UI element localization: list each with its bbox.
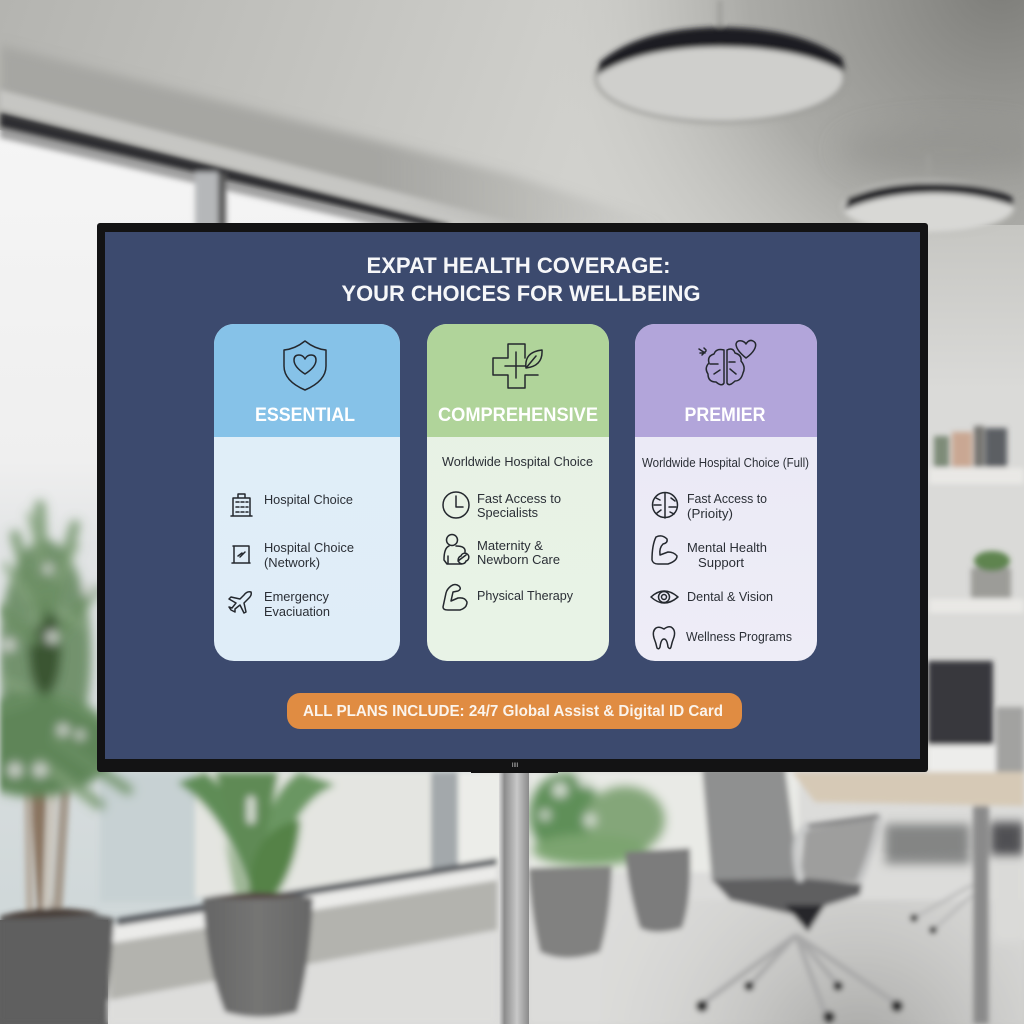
- footer banner: ALL PLANS INCLUDE: 24/7 Global Assist & Digital ID Card: [303, 703, 723, 720]
- window mullion: [195, 172, 218, 242]
- icon: brain and heart: [699, 340, 756, 385]
- text: mental health support: [687, 541, 767, 570]
- lower window mullion: [431, 772, 458, 872]
- monitor brand mark: IIII: [512, 763, 519, 769]
- right plant: [529, 773, 665, 866]
- shadow band: [0, 45, 670, 232]
- text: hospital choice: Hospital Choice: [264, 493, 353, 507]
- chair: [696, 768, 972, 1023]
- text: fast access priority: [687, 492, 767, 521]
- floor: [108, 930, 497, 1024]
- icon: clock: [443, 492, 469, 518]
- icon: flexed arm: [443, 584, 467, 610]
- panel: essential: [214, 324, 400, 661]
- icon: tooth: [653, 627, 675, 649]
- sill top: [112, 862, 497, 943]
- back monitor: [928, 661, 993, 746]
- text: fast access to specialists: [477, 492, 561, 520]
- text: emergency evacuation: [264, 590, 330, 619]
- footer banner: [287, 693, 742, 729]
- text: dental and vision: Dental & Vision: [687, 590, 773, 604]
- icon: hospital building: [231, 494, 252, 516]
- sill front: [110, 877, 497, 1000]
- text: hospital choice network: (Network): [264, 556, 320, 570]
- title: EXPAT HEALTH COVERAGE:: [366, 253, 670, 278]
- icon: shield with heart: [284, 341, 326, 390]
- left pot: [0, 911, 114, 1024]
- text: physical therapy: Physical Therapy: [477, 589, 574, 603]
- icon: cross with leaf: [493, 344, 542, 388]
- shelf plant: [971, 551, 1011, 598]
- text: worldwide hospital choice full: Worldwide Hospital Choice (Full): [642, 456, 809, 470]
- title: [342, 253, 700, 306]
- centre plant: [178, 772, 335, 900]
- title: YOUR CHOICES FOR WELLBEING: [342, 281, 700, 306]
- panel: comprehensive: [427, 324, 609, 661]
- right pots: [625, 848, 690, 932]
- icon: clipboard: [232, 546, 250, 563]
- under desk dark: [885, 822, 1024, 942]
- text: hospital choice network: Hospital Choice: [264, 541, 354, 555]
- desk: [792, 772, 1024, 806]
- icon: mother and baby: [444, 534, 469, 564]
- text: maternity newborn care: Maternity &: [477, 539, 544, 553]
- text: fast access priority: Fast Access to: [687, 492, 767, 506]
- icon: globe brain: [652, 492, 678, 518]
- centre pot: [203, 893, 313, 1017]
- icon: flexed arm: [652, 536, 677, 564]
- text: fast access to specialists: Fast Access to: [477, 492, 561, 506]
- text: fast access to specialists: Specialists: [477, 506, 538, 520]
- window dark track: [117, 858, 497, 926]
- text: maternity newborn care: Newborn Care: [477, 553, 560, 567]
- ceiling lamp small: [842, 155, 1014, 233]
- wall items on right: [929, 468, 1024, 484]
- text: hospital choice network: [264, 541, 354, 570]
- shelf books: [934, 426, 1007, 467]
- light ridge: [0, 90, 600, 240]
- heading: premier: PREMIER: [684, 405, 766, 426]
- stand pole: [499, 770, 529, 1024]
- window frame top: [0, 112, 450, 233]
- left tree foliage: [0, 505, 128, 805]
- window lower haze: [100, 772, 195, 902]
- heading: essential: ESSENTIAL: [255, 405, 355, 426]
- text: emergency evacuation: Evaciuation: [264, 605, 330, 619]
- right window: [529, 772, 799, 872]
- screen: [105, 232, 920, 759]
- text: maternity newborn care: [477, 539, 560, 567]
- ceiling lamp large: [596, 0, 845, 122]
- text: emergency evacuation: Emergency: [264, 590, 330, 604]
- monitor frame: [97, 223, 928, 772]
- text: fast access priority: (Prioity): [687, 507, 733, 521]
- left tree trunks: [24, 780, 70, 915]
- heading: comprehensive: COMPREHENSIVE: [438, 405, 598, 426]
- monitor stand clasp: [471, 770, 558, 773]
- text: mental health support: Mental Health: [687, 541, 767, 555]
- text: mental health support: Support: [698, 556, 745, 570]
- text: worldwide hospital choice: Worldwide Hospital Choice: [442, 455, 593, 469]
- icon: airplane: [229, 592, 251, 613]
- icon: eye: [651, 591, 678, 603]
- panel: premier: [635, 324, 817, 661]
- text: wellness programs: Wellness Programs: [686, 630, 792, 644]
